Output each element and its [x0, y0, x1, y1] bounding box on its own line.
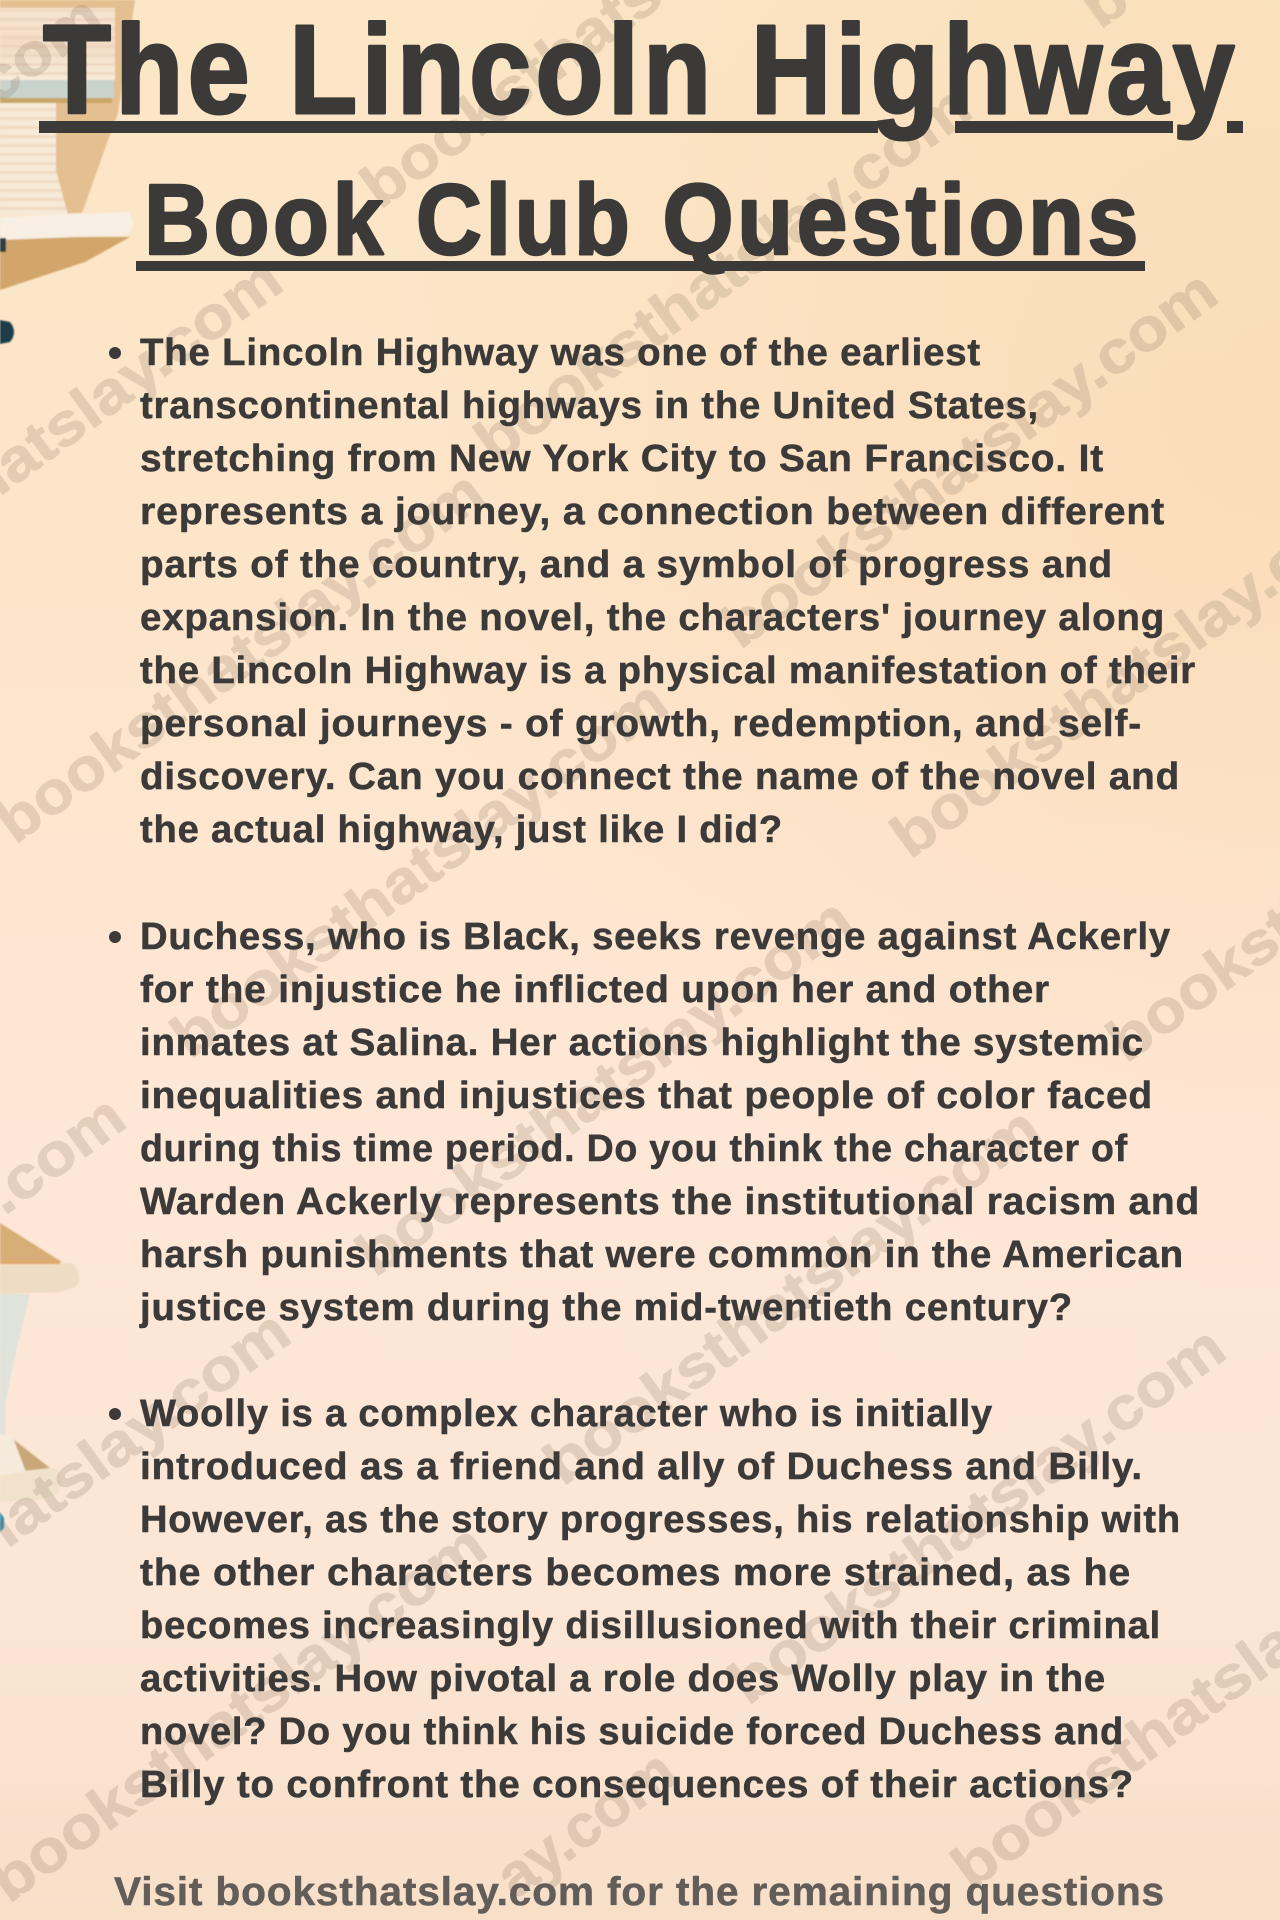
question 1: the actual highway, just like I did? — [140, 809, 783, 851]
footer call to action: Visit booksthatslay.com for the remaining questions — [114, 1870, 1165, 1914]
watermarks: booksthatslay.com — [531, 1094, 1052, 1498]
watermarks: booksthatslay.com — [708, 257, 1229, 661]
question 1: discovery. Can you connect the name of the novel and — [140, 756, 1180, 798]
question 2: harsh punishments that were common in the American — [140, 1234, 1184, 1276]
question 2 — [109, 916, 1200, 1329]
watermarks: booksthatslay.com — [158, 667, 679, 1071]
question 1: expansion. In the novel, the characters' journey along — [140, 597, 1165, 639]
watermarks: booksthatslay.com — [462, 72, 983, 476]
watermarks: ay.com — [483, 1736, 688, 1911]
question 3: Billy to confront the consequences of their actions? — [140, 1764, 1134, 1806]
question 1: the Lincoln Highway is a physical manifestation of their — [140, 650, 1196, 692]
question 3: activities. How pivotal a role does Wolly play in the — [140, 1658, 1106, 1700]
question 3: However, as the story progresses, his relationship with — [140, 1499, 1181, 1541]
question 2: inmates at Salina. Her actions highlight the systemic — [140, 1022, 1144, 1064]
question 2: for the injustice he inflicted upon her and other — [140, 969, 1050, 1011]
watermarks: booksthatslay.com — [716, 1313, 1237, 1717]
question 1: stretching from New York City to San Francisco. It — [140, 438, 1104, 480]
decorative lamp: lower left — [0, 1223, 79, 1532]
question 2: during this time period. Do you think the character of — [140, 1128, 1128, 1170]
question 2: justice system during the mid-twentieth century? — [139, 1287, 1073, 1329]
question 3 — [109, 1393, 1181, 1806]
subtitle: Book Club Questions — [144, 164, 1142, 276]
question 1: The Lincoln Highway was one of the earliest — [140, 332, 981, 374]
question 2: Warden Ackerly represents the institutional racism and — [140, 1181, 1200, 1223]
question 3: becomes increasingly disillusioned with their criminal — [140, 1605, 1161, 1647]
question 1: parts of the country, and a symbol of progress and — [140, 544, 1113, 586]
question 3: the other characters becomes more strained, as he — [140, 1552, 1131, 1594]
question 1: personal journeys - of growth, redemption, and self- — [140, 703, 1142, 745]
question 1: transcontinental highways in the United States, — [140, 385, 1039, 427]
question 1 — [109, 332, 1196, 851]
question 2: Duchess, who is Black, seeks revenge against Ackerly — [140, 916, 1171, 958]
question 3: novel? Do you think his suicide forced Duchess and — [140, 1711, 1124, 1753]
question 3: Woolly is a complex character who is initially — [140, 1393, 993, 1435]
question 1: represents a journey, a connection between different — [140, 491, 1165, 533]
question 2: inequalities and injustices that people of color faced — [140, 1075, 1153, 1117]
question 3: introduced as a friend and ally of Duchess and Billy. — [140, 1446, 1143, 1488]
watermarks: booksthatslay.com — [343, 885, 864, 1289]
decorative lamp: top left — [0, 0, 135, 344]
